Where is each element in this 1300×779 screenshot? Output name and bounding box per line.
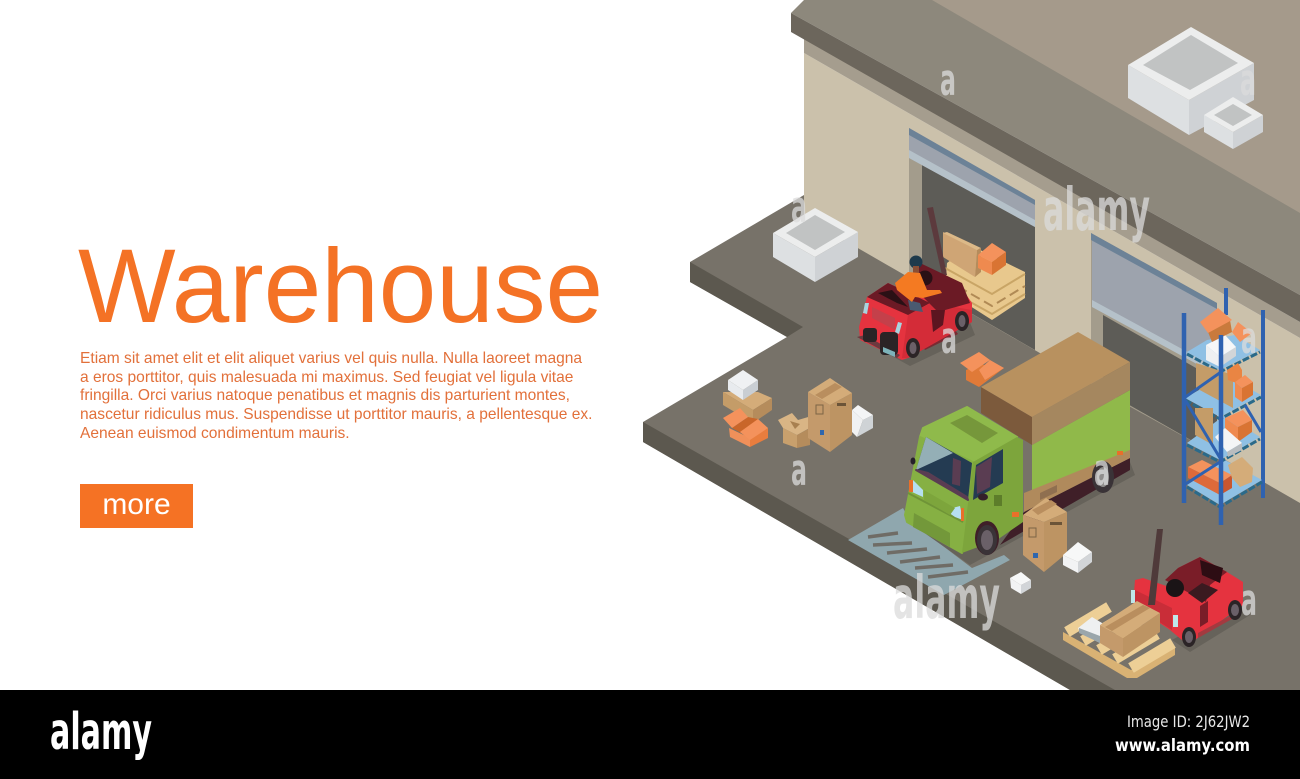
- body text: [80, 350, 592, 442]
- windshield: [916, 437, 972, 500]
- open brown box: [778, 413, 815, 448]
- website: www.alamy.com: [1115, 736, 1250, 756]
- more button: more: [102, 488, 171, 521]
- white cube: [1063, 542, 1092, 573]
- truck cab: [905, 407, 1023, 555]
- watermarks: [791, 55, 1257, 632]
- truck shadow: [906, 462, 1135, 565]
- orange open box near truck: [960, 352, 1004, 387]
- watermarks: alamy: [1043, 175, 1150, 244]
- side window: [973, 449, 1003, 500]
- rack back posts: [1226, 288, 1263, 498]
- footer logo: alamy: [50, 703, 152, 762]
- truck chassis: [1000, 458, 1130, 545]
- tall box by truck: [1023, 498, 1067, 572]
- ground vent box: [773, 208, 858, 282]
- more button: [80, 484, 193, 528]
- ground slab: [643, 195, 1300, 690]
- title: Warehouse: [78, 228, 603, 344]
- headlights: [912, 480, 923, 497]
- watermarks: a: [791, 182, 807, 233]
- body text: Etiam sit amet elit et elit aliquet varius vel quis nulla. Nulla laoreet magna: [80, 350, 582, 367]
- body text: nascetur ridiculus mus. Suspendisse ut porttitor mauris, a pellentesque ex.: [80, 406, 592, 423]
- watermarks: a: [791, 445, 807, 496]
- cardboard box pile left: [723, 370, 772, 447]
- mirrors: [978, 494, 988, 500]
- body text: Aenean euismod condimentum mauris.: [80, 425, 350, 442]
- shelves: [1185, 335, 1262, 505]
- truck cargo box: [981, 332, 1130, 512]
- loading door 2: [1091, 233, 1217, 455]
- warehouse building: [791, 0, 1300, 503]
- rooftop vent large: [1128, 27, 1254, 135]
- tall brown box: [808, 378, 852, 452]
- watermarks: a: [1241, 313, 1257, 364]
- pallet with box: [1063, 601, 1175, 678]
- floor marking: [848, 508, 1010, 595]
- body text: fringilla. Orci varius natoque penatibus et magnis dis parturient montes,: [80, 387, 570, 404]
- forklift with driver: [857, 207, 975, 366]
- small white cube: [1010, 572, 1031, 594]
- door handle: [994, 495, 1002, 506]
- watermarks: a: [1240, 55, 1256, 106]
- delivery truck: [905, 332, 1135, 565]
- rack front posts and braces: [1184, 313, 1261, 525]
- loading door 1: [909, 128, 1035, 350]
- front wheel: [975, 521, 999, 555]
- small white box: [852, 405, 873, 437]
- front grille: [913, 513, 950, 547]
- watermarks: a: [940, 55, 956, 106]
- watermarks: a: [1241, 575, 1257, 626]
- footer bar: [0, 690, 1300, 779]
- watermarks: a: [1094, 445, 1110, 496]
- body text: a eros porttitor, quis malesuada mi maximus. Sed feugiat vel ligula vitae: [80, 369, 573, 386]
- pallet stack with boxes: [943, 232, 1025, 320]
- image id: Image ID: 2J62JW2: [1127, 712, 1250, 731]
- forklift bottom right: [1131, 529, 1250, 652]
- storage rack: [1184, 288, 1263, 525]
- shelf boxes: [1188, 308, 1253, 495]
- watermarks: a: [941, 313, 957, 364]
- rooftop vent small: [1204, 97, 1263, 149]
- watermarks: alamy: [893, 563, 1000, 632]
